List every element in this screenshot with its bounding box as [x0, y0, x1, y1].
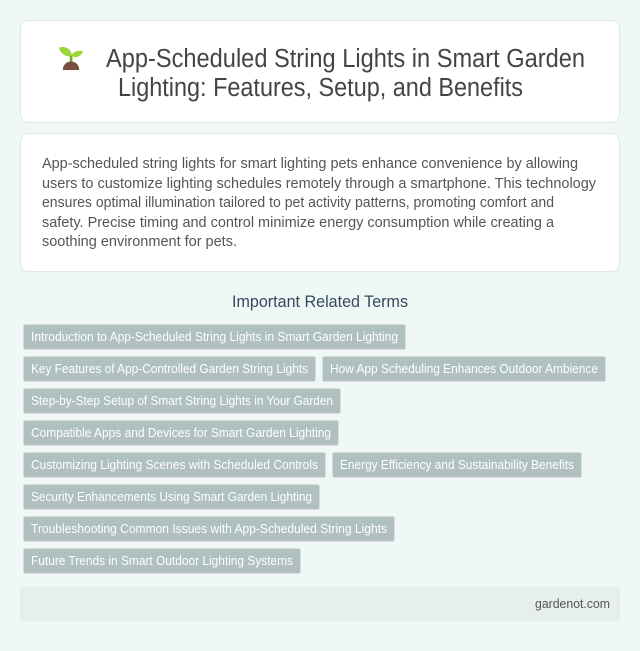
text block: description: users to customize lighting schedules remotely through a smartphone. This technology [42, 175, 596, 192]
tag: future trends: Future Trends in Smart Outdoor Lighting Systems [31, 553, 293, 568]
tag: compatible apps [24, 420, 338, 446]
footer [20, 587, 620, 621]
title: App-Scheduled String Lights in Smart Garden [106, 45, 585, 73]
tag: troubleshooting [24, 516, 394, 542]
tag: introduction [24, 324, 406, 350]
tag: security: Security Enhancements Using Smart Garden Lighting [31, 489, 312, 504]
text block: description [42, 155, 596, 250]
title: Lighting: Features, Setup, and Benefits [118, 74, 523, 102]
tag: lighting scenes [24, 452, 326, 478]
tag: ambience [322, 356, 606, 382]
tag: troubleshooting: Troubleshooting Common Issues with App-Scheduled String Lights [31, 521, 387, 536]
panel: title card [20, 20, 620, 122]
tag: compatible apps: Compatible Apps and Devices for Smart Garden Lighting [31, 425, 331, 440]
tag: setup [24, 388, 340, 414]
tag: security [24, 484, 320, 510]
panel: description [20, 134, 620, 272]
tag: energy efficiency [332, 452, 582, 478]
tag: key features [24, 356, 316, 382]
footer: gardenot.com [535, 597, 610, 611]
title [106, 45, 585, 102]
heading: related terms: Important Related Terms [232, 293, 408, 311]
tag: ambience: How App Scheduling Enhances Outdoor Ambience [330, 361, 598, 376]
text block: description: soothing environment for pets. [42, 233, 237, 250]
icon: sprout [59, 47, 83, 70]
tag: lighting scenes: Customizing Lighting Scenes with Scheduled Controls [31, 457, 318, 472]
tag: setup: Step-by-Step Setup of Smart String Lights in Your Garden [31, 393, 333, 408]
tag: energy efficiency: Energy Efficiency and Sustainability Benefits [340, 457, 574, 472]
tag: future trends [24, 548, 300, 574]
tag: key features: Key Features of App-Controlled Garden String Lights [31, 361, 308, 376]
text block: description: safety. Precise timing and control minimize energy consumption while creating a [42, 214, 555, 231]
tag: introduction: Introduction to App-Scheduled String Lights in Smart Garden Lighting [31, 329, 398, 344]
text block: description: ensures optimal illumination tailored to pet activity patterns, promoting comfort and [42, 194, 554, 211]
tag list [24, 324, 606, 574]
text block: description: App-scheduled string lights for smart lighting pets enhance convenience by allowing [42, 155, 578, 172]
